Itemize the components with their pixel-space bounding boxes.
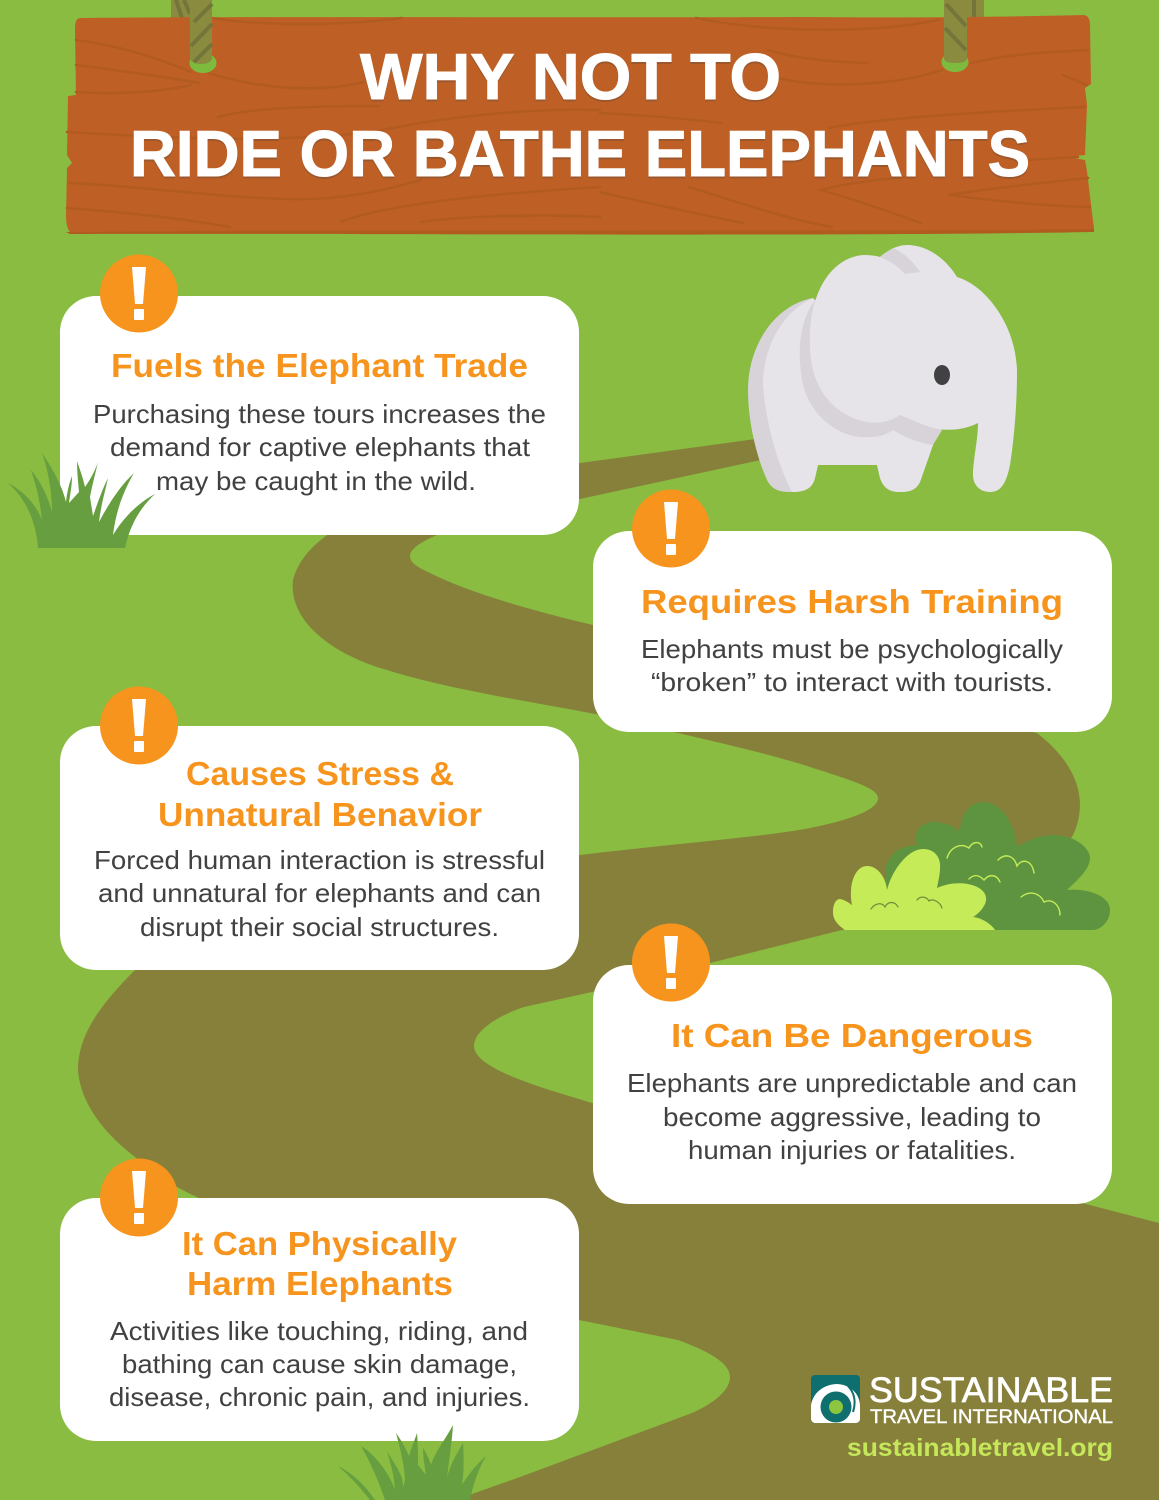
body text	[627, 1068, 1077, 1165]
heading: Requires Harsh Training	[641, 583, 1063, 620]
rope: right back strand	[965, 0, 984, 20]
heading: Fuels the Elephant Trade	[111, 347, 528, 384]
body text: human injuries or fatalities.	[688, 1135, 1016, 1165]
winding dirt path	[78, 437, 1159, 1500]
right rope hole and rope	[942, 0, 968, 72]
head lobe shadow	[880, 248, 920, 274]
title: RIDE OR BATHE ELEPHANTS	[130, 117, 1030, 190]
illustration: bush	[833, 802, 1110, 930]
card: Causes Stress and Unnatural Benavior	[60, 686, 579, 970]
elephant body	[748, 298, 940, 492]
body text: disease, chronic pain, and injuries.	[109, 1382, 530, 1412]
illustration: grass tuft left	[8, 453, 155, 548]
elephant head and trunk	[810, 245, 1017, 492]
heading: Harm Elephants	[187, 1265, 453, 1302]
icon: exclamation badge	[100, 254, 178, 332]
light bush	[833, 849, 995, 930]
body text: may be caught in the wild.	[156, 466, 476, 496]
card: It Can Physically Harm Elephants	[60, 1158, 579, 1441]
dark bush	[885, 802, 1110, 930]
body text: Activities like touching, riding, and	[110, 1316, 528, 1346]
title	[130, 40, 1030, 190]
neck shadow	[800, 300, 945, 445]
rope: left back strand	[171, 0, 193, 24]
body text	[641, 634, 1063, 697]
body text: disrupt their social structures.	[140, 912, 499, 942]
heading	[182, 1225, 458, 1302]
card: Requires Harsh Training	[593, 490, 1112, 732]
illustration: elephant	[748, 245, 1017, 492]
body text: Purchasing these tours increases the	[93, 399, 546, 429]
icon: logo swirl	[811, 1375, 860, 1423]
heading: Unnatural Benavior	[158, 796, 482, 833]
icon: exclamation badge	[100, 1158, 178, 1236]
body text	[93, 399, 546, 496]
logo: Sustainable Travel International: TRAVEL INTERNATIONAL	[870, 1407, 1113, 1428]
body text: become aggressive, leading to	[663, 1102, 1041, 1132]
logo: Sustainable Travel International: SUSTAINABLE	[869, 1371, 1113, 1410]
website: sustainabletravel.org	[847, 1434, 1113, 1462]
body text: demand for captive elephants that	[110, 432, 531, 462]
illustration: grass tuft bottom	[338, 1425, 486, 1500]
bush leaf details	[871, 843, 1060, 915]
icon: exclamation badge	[632, 924, 710, 1002]
title: WHY NOT TO	[360, 40, 781, 113]
elephant eye	[934, 365, 950, 385]
icon: exclamation badge	[632, 490, 710, 568]
heading: It Can Physically	[182, 1225, 458, 1262]
heading: It Can Be Dangerous	[671, 1017, 1033, 1054]
heading: Causes Stress &	[186, 755, 454, 792]
card: It Can Be Dangerous	[593, 924, 1112, 1204]
body text	[109, 1316, 530, 1412]
logo: Sustainable Travel International	[811, 1371, 1113, 1462]
sign planks	[66, 15, 1094, 235]
body text: Forced human interaction is stressful	[94, 845, 545, 875]
icon: exclamation badge	[100, 686, 178, 764]
heading	[158, 755, 482, 833]
card: Fuels the Elephant Trade	[60, 254, 579, 535]
left rope hole and rope	[190, 0, 216, 73]
body text: Elephants must be psychologically	[641, 634, 1063, 664]
body text: Elephants are unpredictable and can	[627, 1068, 1077, 1098]
wooden sign with title	[66, 0, 1094, 235]
body text: “broken” to interact with tourists.	[651, 667, 1053, 697]
wood grain	[66, 18, 1094, 235]
body text: bathing can cause skin damage,	[122, 1349, 517, 1379]
body text: and unnatural for elephants and can	[98, 878, 541, 908]
body text	[94, 845, 545, 942]
